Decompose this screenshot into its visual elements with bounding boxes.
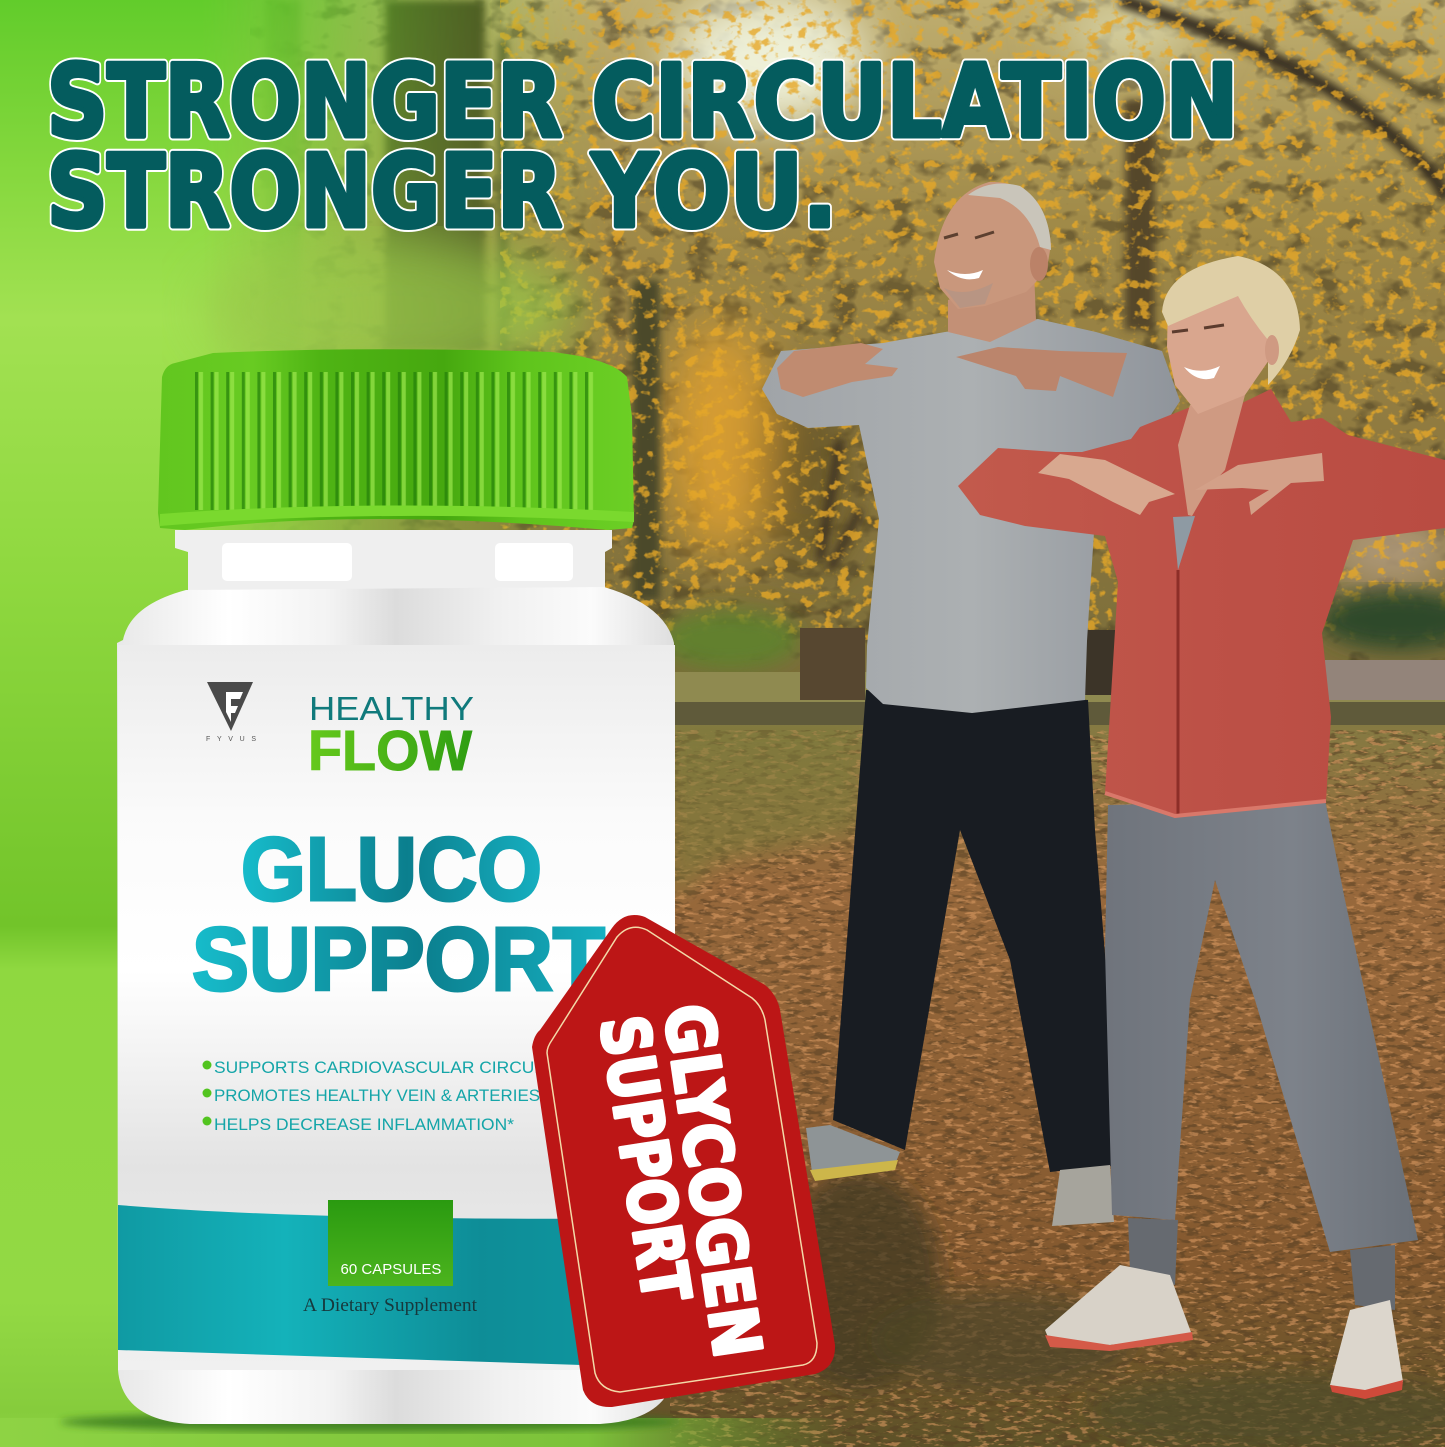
dietary supplement text: A Dietary Supplement [303, 1295, 478, 1316]
woman legs [1105, 800, 1418, 1252]
woman jacket [958, 389, 1445, 816]
lawn strip [670, 672, 1445, 702]
ground shadows [780, 1170, 1445, 1447]
headline [47, 43, 1238, 250]
woman right hand [1195, 453, 1324, 515]
capsule count box [328, 1200, 453, 1286]
headline fill: STRONGER [47, 133, 562, 250]
man right hand [956, 347, 1127, 397]
icon: Fyvus logo [206, 682, 256, 743]
product name: Gluco Support: GLUCO [241, 820, 542, 920]
woman smile [1184, 366, 1220, 379]
bottle neck [175, 530, 612, 595]
jacket hem [1105, 793, 1326, 816]
headline outline: CIRCULATION [592, 43, 1238, 160]
man smile [947, 270, 983, 279]
bottle teal band [118, 1205, 675, 1368]
headline outline: STRONGER [47, 43, 562, 160]
bottle body [117, 587, 675, 1424]
product name: Gluco Support: SUPPORT [192, 910, 605, 1010]
brand: Healthy Flow: HEALTHY [309, 690, 474, 727]
benefit list: SUPPORTS CARDIOVASCULAR CIRCUL [214, 1058, 544, 1077]
man shoes [806, 1125, 1114, 1226]
neck highlights [222, 543, 573, 581]
bottle label [118, 645, 675, 1370]
bin [800, 628, 865, 700]
woman ankles [1128, 1218, 1178, 1285]
brand: Healthy Flow [308, 690, 474, 783]
background: green fade on left [0, 0, 558, 1418]
soft light and tree masses [665, 0, 1445, 590]
bench [1085, 630, 1120, 695]
man head [934, 182, 1051, 309]
man neck [948, 270, 1036, 342]
benefit list [202, 1058, 544, 1134]
background: green floor strip [0, 1418, 840, 1447]
product bottle [60, 349, 680, 1432]
woman undershirt [1173, 516, 1195, 570]
headline outline [47, 43, 1238, 250]
product name: Gluco Support [192, 820, 605, 1010]
jacket zip [1176, 570, 1180, 815]
park ground [0, 725, 1445, 1447]
icon: Fyvus logo: FYVUS [206, 736, 256, 743]
headline outline: YOU. [591, 133, 837, 250]
man ear [1030, 247, 1048, 281]
headline outline: STRONGER [47, 133, 562, 250]
background: green haze above bottle [200, 240, 580, 380]
man hair [968, 183, 1051, 250]
capsule count box: 60 CAPSULES [341, 1261, 441, 1278]
headline fill: STRONGER [47, 43, 562, 160]
yellow leaves texture [500, 0, 1445, 640]
cap lower rim [160, 505, 634, 526]
man legs [833, 690, 1122, 1172]
far path [1325, 660, 1445, 700]
tag text: SUPPORT [584, 1011, 705, 1307]
woman ear [1265, 335, 1279, 365]
bushes [660, 590, 1445, 670]
woman neck [1178, 395, 1245, 516]
dark branches texture [250, 0, 1445, 660]
cap ribs [195, 372, 600, 510]
tag text [584, 999, 776, 1363]
ground shadow [60, 1412, 680, 1432]
person: man exercising [762, 182, 1180, 1226]
low wall [675, 702, 1445, 725]
headline fill: CIRCULATION [592, 43, 1238, 160]
benefit list: HELPS DECREASE INFLAMMATION* [214, 1115, 514, 1134]
woman hair [1162, 256, 1300, 385]
headline fill [47, 43, 1238, 250]
headline fill: YOU. [591, 133, 837, 250]
man sweatshirt [762, 319, 1180, 713]
man left hand [777, 343, 898, 397]
man eyes [944, 232, 994, 238]
woman shoes [1045, 1265, 1403, 1399]
tag text: GLYCOGEN [648, 999, 776, 1363]
ground: leaf litter [670, 730, 1445, 1447]
woman head [1167, 285, 1272, 414]
woman eyes [1172, 325, 1224, 332]
tree trunks [265, 0, 1445, 600]
woman left hand [1038, 454, 1175, 515]
person: woman exercising [958, 256, 1445, 1399]
brand: Healthy Flow: FLOW [308, 719, 472, 783]
benefit list: PROMOTES HEALTHY VEIN & ARTERIES [214, 1086, 540, 1105]
green cap [158, 349, 634, 530]
red tag: Glycogen Support [532, 915, 835, 1407]
man stubble [944, 283, 993, 308]
ground: grass at left [670, 725, 860, 900]
